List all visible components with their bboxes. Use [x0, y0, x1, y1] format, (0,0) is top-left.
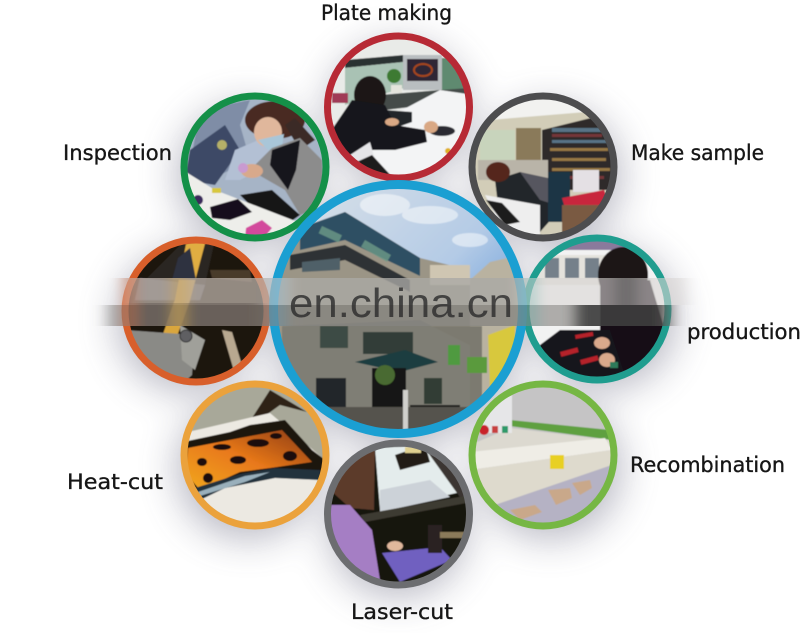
label: Laser-cut: Laser-cut	[351, 600, 453, 624]
label: Recombination: Recombination	[630, 453, 785, 477]
label: Inspection: Inspection	[63, 141, 172, 165]
circle: Plate making photo	[324, 32, 473, 180]
circle: Make sample photo	[465, 90, 620, 245]
circle: Laser-cut photo	[322, 440, 477, 590]
soft circle shadows	[118, 44, 675, 596]
circle: Embroidery machine close-up photo	[120, 235, 270, 395]
label: Make sample: Make sample	[631, 141, 764, 165]
circle: Heat-cut photo	[180, 380, 330, 530]
watermark text: en.china.cn	[289, 280, 513, 326]
circle: factory building photo	[270, 180, 530, 442]
circle: Inspection photo	[180, 90, 330, 245]
label: production: production	[687, 320, 800, 344]
label: Heat-cut: Heat-cut	[67, 470, 163, 494]
label: Plate making: Plate making	[321, 1, 452, 25]
watermark band	[108, 278, 685, 326]
circle: Recombination photo	[465, 380, 620, 535]
circle: production photo	[525, 235, 670, 385]
